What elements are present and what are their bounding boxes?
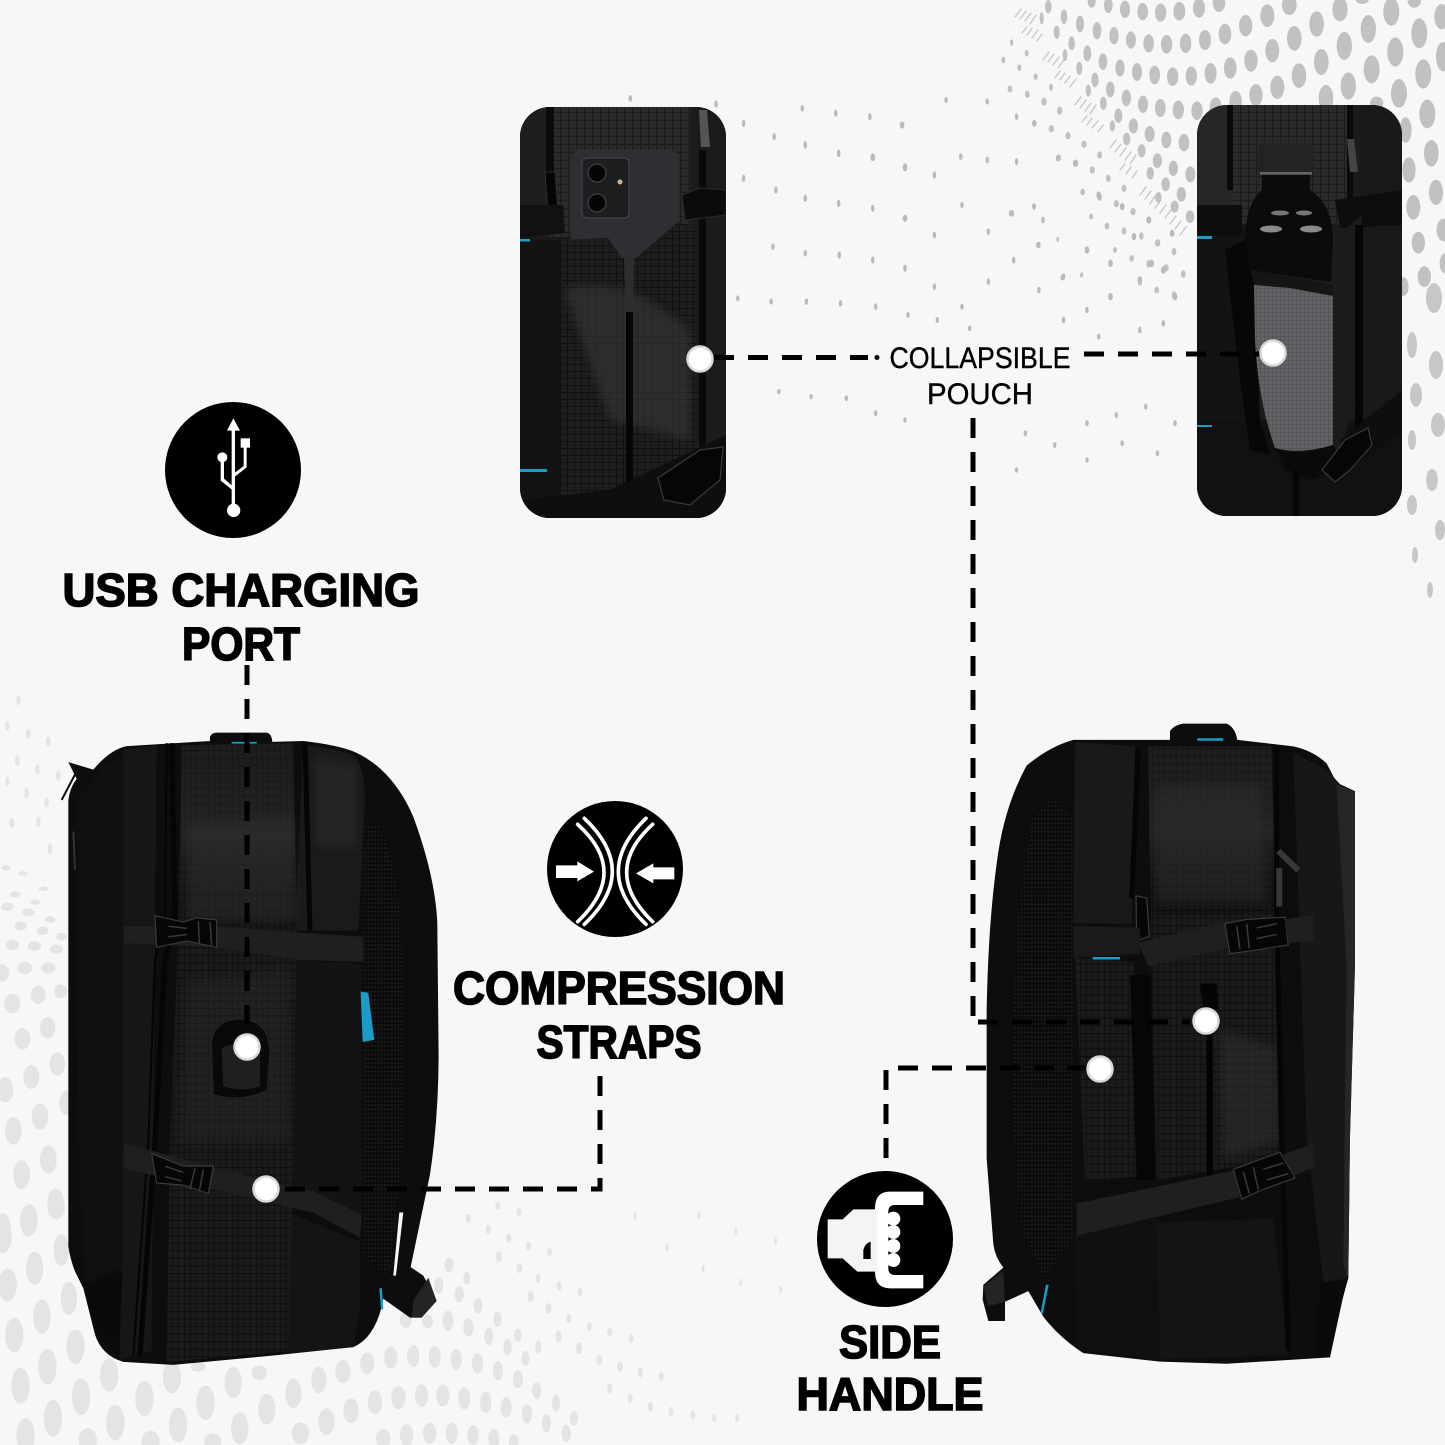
photo: phone in pouch bbox=[520, 107, 726, 518]
photo: bottle in pouch bbox=[1197, 105, 1402, 516]
heading: port: PORT bbox=[182, 618, 300, 670]
phone bbox=[571, 150, 679, 265]
upper compression strap bbox=[123, 926, 363, 962]
left panels bbox=[120, 745, 157, 1360]
heading: usb charging port: USB CHARGING bbox=[62, 564, 420, 616]
blue accents bbox=[232, 742, 383, 1309]
zippers bbox=[140, 743, 175, 1356]
callout: side handle connector bbox=[886, 1068, 1088, 1170]
dark handle fold bbox=[1130, 975, 1155, 1180]
illustration: right backpack side view bbox=[983, 724, 1355, 1364]
upper side panel bbox=[1073, 742, 1135, 924]
halftone dots: right edge bbox=[1407, 283, 1445, 598]
halftone streaks: top right band bbox=[1015, 9, 1186, 235]
bottle bbox=[1245, 172, 1333, 282]
icon: side handle grip bbox=[817, 1171, 953, 1307]
strap buckle bbox=[983, 1271, 1005, 1306]
callout: collapsible pouch connector to front pocket bbox=[978, 1020, 1190, 1024]
upper compression strap bbox=[1073, 926, 1140, 958]
label: pouch: POUCH bbox=[927, 378, 1033, 411]
heading: straps: STRAPS bbox=[536, 1016, 702, 1068]
icon: usb symbol bbox=[165, 402, 301, 538]
center panel bbox=[167, 743, 297, 1362]
illustration: left backpack side view bbox=[62, 733, 439, 1365]
callout: compression straps connector bbox=[285, 1062, 600, 1189]
icon: compression arrows bbox=[547, 801, 683, 937]
halftone dots: small middle field bbox=[629, 95, 1177, 473]
zip pulls bbox=[1278, 851, 1298, 907]
mesh pocket bbox=[1254, 285, 1333, 451]
halftone dots: left edge bbox=[0, 695, 74, 1245]
heading: handle: HANDLE bbox=[796, 1368, 984, 1420]
center panel bbox=[1148, 746, 1282, 1180]
right panels bbox=[1293, 753, 1347, 1283]
label: collapsible: COLLAPSIBLE bbox=[890, 342, 1070, 375]
marker dots bbox=[234, 340, 1286, 1202]
strap gap bbox=[393, 1212, 403, 1276]
strap buckle bbox=[412, 1278, 437, 1318]
silhouette bbox=[983, 724, 1355, 1364]
right panel bbox=[295, 745, 365, 930]
heading: compression: COMPRESSION bbox=[453, 962, 785, 1014]
heading: side: SIDE bbox=[839, 1316, 941, 1368]
halftone dots: top right bbox=[1001, 0, 1445, 299]
lower compression strap bbox=[1077, 1171, 1240, 1236]
silhouette bbox=[68, 733, 439, 1365]
zippers bbox=[1277, 748, 1288, 1351]
halftone dots: bottom left bbox=[0, 1197, 782, 1445]
back mesh panel bbox=[362, 823, 404, 1276]
callout: collapsible pouch connector lines bbox=[714, 354, 1262, 1022]
brand tag bbox=[361, 991, 374, 1042]
callout: usb charging port connector bbox=[244, 665, 250, 1035]
usb port patch bbox=[212, 1019, 270, 1098]
blue accents bbox=[1041, 738, 1223, 1315]
lower compression strap bbox=[123, 1143, 362, 1238]
back mesh panel bbox=[1012, 795, 1073, 1278]
